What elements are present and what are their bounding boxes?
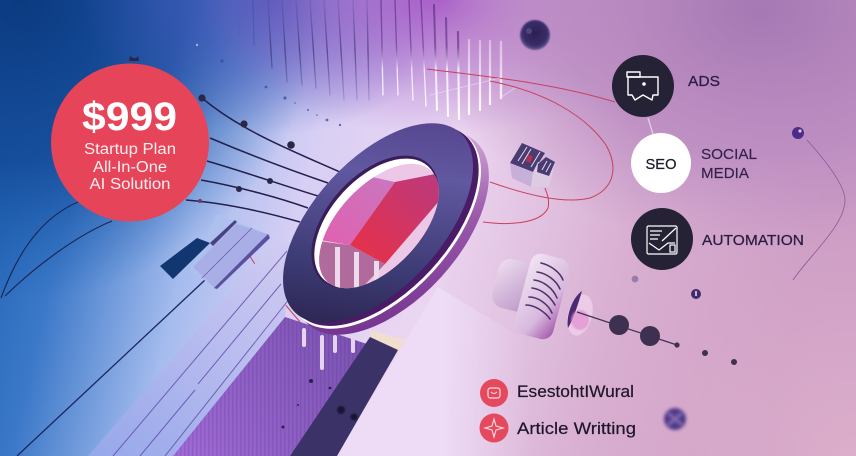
lower left curves <box>1 202 112 298</box>
ring dark groove <box>254 92 513 360</box>
peach block <box>370 330 405 352</box>
faint white connector lines <box>430 78 515 98</box>
badge description <box>84 141 176 193</box>
label: automation: AUTOMATION <box>702 232 804 249</box>
icon: sparkle <box>485 419 503 437</box>
thin red connector curves <box>233 69 615 322</box>
connector between ads and seo <box>648 118 653 134</box>
curve dots <box>129 56 295 203</box>
dark diagonal band <box>290 337 398 456</box>
small 3D chip icon <box>510 143 555 187</box>
seo text: SEO <box>646 156 676 173</box>
mic ribs <box>526 263 563 319</box>
list item: article writting <box>480 414 636 442</box>
icon: rounded square <box>488 388 500 398</box>
scattered particles <box>132 5 341 126</box>
hole white lip <box>291 136 461 310</box>
badge description: Startup Plan <box>84 141 176 158</box>
ring outer pale edge <box>260 97 524 369</box>
central ring <box>283 123 489 335</box>
badge description: AI Solution <box>90 176 170 193</box>
mic rear bulb <box>490 256 542 315</box>
badge description: All-In-One <box>93 159 167 176</box>
dark curves connecting badge and ring <box>186 98 340 222</box>
ring white highlight <box>254 93 516 363</box>
blurred sphere bottom <box>664 408 686 430</box>
small floating dots <box>632 276 701 299</box>
vertical bars at top <box>220 0 501 119</box>
ring face <box>248 90 508 356</box>
small planet and trailing curve <box>792 127 845 280</box>
dotted line from microphone <box>577 312 737 365</box>
label: social media: MEDIA <box>701 165 749 182</box>
list item: esestoht wural: EsestohtIWural <box>517 383 634 401</box>
diagonal long line <box>17 280 205 456</box>
label: social media <box>701 146 757 182</box>
mic lens <box>563 292 597 338</box>
list item: esestoht wural <box>480 379 634 407</box>
seo and social media item <box>631 133 757 193</box>
icon: billboard folder <box>627 72 658 100</box>
blurred sphere top <box>520 20 550 50</box>
hole interior <box>319 164 439 288</box>
hole rim <box>287 132 463 312</box>
mic body <box>512 251 572 342</box>
microphone shaped object <box>490 251 597 342</box>
list item: article writting: Article Writting <box>517 420 636 438</box>
price: $999 <box>82 95 177 139</box>
automation item <box>631 208 804 270</box>
diagonal light strip <box>88 238 290 456</box>
price badge <box>51 64 209 222</box>
label: social media: SOCIAL <box>701 146 757 163</box>
pale wedge <box>337 287 530 456</box>
label: ads: ADS <box>688 73 720 90</box>
striped purple panel <box>173 317 370 456</box>
small tilted panel <box>160 214 270 289</box>
dark blue block <box>160 238 210 279</box>
ads item <box>612 55 720 117</box>
icon: mail chart <box>647 226 677 254</box>
